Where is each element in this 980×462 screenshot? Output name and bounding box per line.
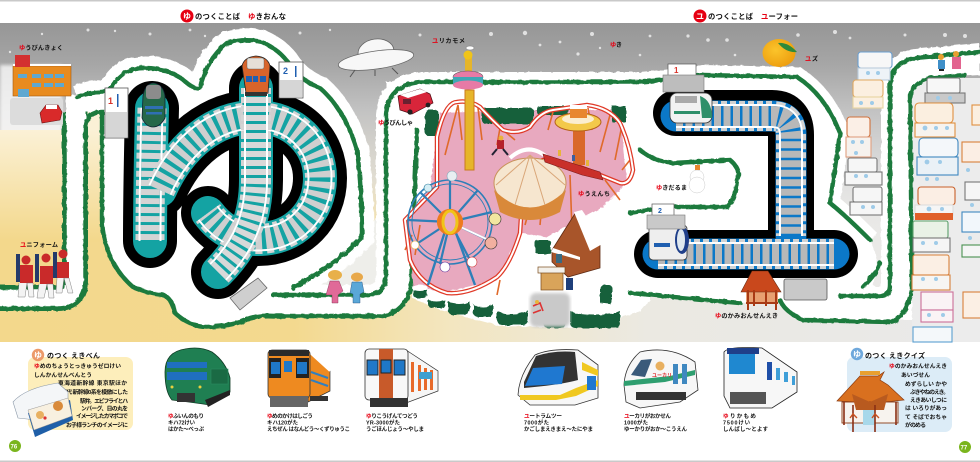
panel: station quiz: て そばでおちゃ [905, 413, 947, 421]
heading: ユのつくことば: ユーフォー [761, 12, 798, 21]
panel: station quiz: がのめる [905, 421, 926, 429]
map labels: ユニフォーム [20, 242, 58, 249]
map labels: ゆのかみおんせんえき [715, 312, 778, 320]
skier [533, 300, 543, 313]
map labels: ユリカモメ [432, 38, 465, 45]
panel: station quiz: ぶきやねのえき。 [910, 388, 949, 396]
amusement park [405, 46, 633, 328]
letter ゆ track [105, 56, 320, 272]
panel: ekiben: のつく えきべん [47, 351, 100, 360]
log house [551, 210, 604, 277]
panel: ekiben: ゆ [34, 351, 42, 360]
platform sign 2 [647, 204, 685, 229]
train: orange: ゆめのかけはしごう [267, 412, 313, 420]
train: ゆふいんのもり: はかた～べっぷ [168, 425, 205, 433]
platform sign 1 [663, 64, 704, 92]
grey box near ゆ [230, 278, 267, 310]
page number 76 [9, 440, 21, 452]
ground and snowy sky [0, 23, 980, 342]
train: ゆりかもめ: ゆりかもめ [723, 413, 756, 420]
train: ユーカリが丘線: ユーカリ [652, 372, 672, 379]
train: white and orange: ゆりこうげんてつどう [366, 412, 418, 420]
heading: ユのつくことば: ユ [696, 12, 704, 21]
post office [10, 55, 71, 125]
train: orange: えちぜん はなんどう～くずりゅうこ [267, 425, 350, 433]
map labels: ゆき [610, 42, 622, 49]
map labels: ゆうえんち [578, 190, 610, 198]
train: tram: かごしまえきまえ～たにやま [524, 425, 593, 433]
map labels: ゆうびんきょく [19, 44, 63, 52]
platform sign 2: 2 [658, 208, 662, 215]
panel: ekiben [13, 349, 133, 437]
platform sign 1: 1 [674, 66, 679, 75]
person on snow [492, 136, 508, 155]
panel: ekiben: しんかんせんべんとう [34, 372, 92, 379]
platform 1 [105, 88, 128, 138]
children top right [938, 51, 961, 71]
roller coaster track [405, 102, 633, 293]
train: ゆりかもめ [723, 348, 797, 433]
icon: bento train [13, 383, 73, 437]
page number 77: 77 [960, 446, 968, 452]
panel: ekiben: 駅弁。エビフライとハ [80, 397, 128, 405]
train: white and orange: うごほんじょう～やしま [366, 425, 424, 433]
animal figure blue [350, 272, 364, 303]
snow fields and roads [0, 40, 980, 328]
heading: ユのつくことば: のつくことば [708, 12, 754, 21]
train: ユーカリが丘線: ユーカリがおかせん [624, 412, 671, 420]
map labels [19, 38, 819, 320]
panel: ekiben: ゆめのちょうとっきゅうゼロけい [34, 362, 121, 370]
hedge snow caps [412, 285, 621, 318]
panel: station quiz: は いろりがあっ [905, 404, 947, 412]
grey path [530, 293, 570, 327]
snowman [689, 165, 705, 193]
red post car [40, 105, 62, 123]
page number 76: 76 [10, 444, 18, 450]
train: white and orange [365, 349, 438, 433]
small hut [538, 267, 573, 290]
icon: thatched station [837, 371, 904, 432]
apartment blocks [845, 52, 980, 342]
heading: ゆのつくことば: のつくことば [195, 12, 241, 21]
mini silver train [670, 93, 712, 123]
three children in uniforms [16, 250, 73, 298]
map labels: ゆきだるま [656, 184, 687, 192]
park pink ground [407, 110, 627, 292]
panel: ekiben: ンバーグ、日の丸を [81, 404, 128, 412]
train: orange [267, 350, 350, 433]
mini green train [142, 83, 165, 127]
panel: station quiz: えきあいしつに [910, 396, 947, 404]
panel: station quiz [837, 348, 952, 432]
panel: ekiben: イメージしたカマボコで [76, 412, 128, 420]
panel: station quiz: ゆのかみおんせんえき [889, 362, 947, 370]
map labels: ユズ [805, 55, 819, 63]
heading: ゆのつくことば [180, 10, 286, 22]
animal figure pink [326, 270, 343, 303]
platform 2 [279, 62, 303, 98]
panel: station quiz: のつく えきクイズ [865, 351, 925, 360]
yuzu [762, 39, 797, 67]
train: tram [518, 350, 598, 433]
train: ユーカリが丘線 [624, 350, 698, 433]
observation tower [453, 46, 483, 170]
coaster train [543, 150, 603, 180]
train: ゆりかもめ: 7500けい [723, 420, 751, 426]
swing ride [555, 105, 601, 165]
platform 1: 1 [108, 96, 113, 106]
page number 77 [959, 441, 971, 453]
panel: ekiben: お子様ランチのイメージに [66, 421, 128, 429]
train: ゆふいんのもり [165, 348, 230, 433]
panel: station quiz: あいづせん [901, 371, 930, 379]
platform 2: 2 [283, 66, 288, 76]
mini orange train [242, 56, 270, 96]
letter ユ track [647, 64, 834, 300]
map illustration [0, 23, 980, 342]
flying saucer [337, 37, 415, 77]
train: ユーカリが丘線: ゆーかりがおか～こうえん [624, 425, 688, 433]
mini white train [649, 225, 689, 260]
train: tram: 7000がた [524, 418, 549, 426]
coaster supports [405, 105, 630, 295]
heading: ゆのつくことば: ゆきおんな [248, 12, 286, 21]
train: tram: ユートラムツー [524, 413, 562, 420]
train: ゆりかもめ: しんばし～とよす [723, 425, 769, 433]
heading: ゆのつくことば: ゆ [183, 12, 191, 21]
train: orange: キハ120がた [267, 418, 298, 426]
panel: ekiben: 初代 新幹線0系を模倣にした [61, 388, 128, 396]
carousel tent [494, 149, 566, 220]
train: white and orange: YR-3000がた [366, 418, 400, 426]
heading: ユのつくことば [694, 10, 798, 22]
red mail van [398, 89, 433, 115]
panel: ekiben: 東海道新幹線 東京駅ほか [58, 379, 127, 387]
small station [741, 271, 781, 310]
grey platform box [784, 279, 827, 300]
ferris wheel [408, 171, 501, 285]
train: ユーカリが丘線: 1000がた [624, 418, 648, 426]
panel: station quiz: めずらしい かや [905, 380, 947, 388]
panel: station quiz: ゆ [853, 350, 861, 359]
train: ゆふいんのもり: キハ72けい [168, 420, 196, 426]
map labels: ゆうびんしゃ [378, 119, 413, 127]
hedges [413, 106, 626, 328]
train: ゆふいんのもり: ゆふいんのもり [168, 413, 204, 420]
